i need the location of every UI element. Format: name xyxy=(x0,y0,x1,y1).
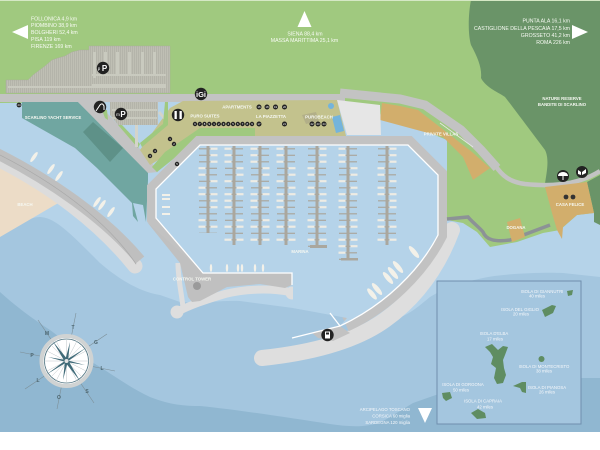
label: Nature reserve: BANDITE DI SCARLINO xyxy=(538,102,587,107)
icon: crane xyxy=(94,101,106,113)
compass rose xyxy=(20,313,115,409)
control tower: CONTROL TOWER xyxy=(173,276,212,282)
numbered location markers: 4 xyxy=(154,149,156,153)
compass rose: T xyxy=(71,325,75,331)
numbered location markers: 16 xyxy=(257,105,261,109)
Casa Felice: CASA FELICE xyxy=(556,202,584,207)
directions: north-west: PISA 119 km xyxy=(31,37,61,43)
label: Nature reserve xyxy=(538,96,587,107)
numbered location markers: 4 xyxy=(228,122,230,126)
directions: north xyxy=(271,11,338,44)
numbered location markers: 7 xyxy=(242,122,244,126)
directions: east: GROSSETO 41,2 km xyxy=(521,33,570,39)
left breakwater xyxy=(0,153,140,266)
scarlino yacht service area xyxy=(22,102,148,222)
outer mole xyxy=(262,230,452,358)
directions: east: PUNTA ALA 16,1 km xyxy=(523,18,570,24)
directions: north-west xyxy=(12,16,78,50)
Casa Felice xyxy=(545,182,594,239)
label: marina: MARINA xyxy=(291,249,309,254)
directions: east xyxy=(474,18,588,46)
compass rose: G xyxy=(94,340,98,346)
island labels: 38 miles xyxy=(536,368,552,374)
numbered location markers: 24 xyxy=(17,103,21,107)
land: green terrain xyxy=(0,0,600,247)
island labels: 20 miles xyxy=(513,312,529,316)
resort labels: PUROBEACH xyxy=(305,114,333,120)
icon: information xyxy=(195,88,207,100)
beach xyxy=(0,162,60,237)
island labels: 40 miles xyxy=(529,294,545,298)
moored boats on piers xyxy=(198,146,396,256)
private villas plot xyxy=(380,103,490,180)
numbered location markers: 19 xyxy=(274,105,277,109)
resort labels xyxy=(190,104,333,120)
control tower xyxy=(173,276,212,290)
directions: north: SIENA 88,4 km xyxy=(287,32,323,38)
inset map: Tuscan archipelago xyxy=(437,281,581,424)
main road xyxy=(0,93,600,185)
outer moored boats xyxy=(29,151,116,218)
numbered location markers: 5 xyxy=(232,122,234,126)
control tower quay xyxy=(147,222,292,302)
resort labels: PURO SUITES xyxy=(190,114,220,118)
numbered location markers: 1 xyxy=(213,122,215,126)
eastern coast road xyxy=(447,217,550,241)
numbered location markers: 8 xyxy=(204,122,206,126)
directions: south xyxy=(360,407,432,425)
numbered location markers: 18 xyxy=(265,105,269,109)
island labels: 17 miles xyxy=(487,336,503,342)
island labels: ISOLA DI PIANOSA xyxy=(528,385,566,390)
island labels: ISOLA DI GORGONA xyxy=(442,382,484,387)
island labels: ISOLA DI GIANNUTRI xyxy=(521,289,563,294)
island labels: ISOLA D'ELBA xyxy=(480,331,508,336)
icon: fuel pump xyxy=(321,329,334,341)
fuel quay xyxy=(312,326,350,341)
label: private villas: PRIVATE VILLAS xyxy=(424,132,458,136)
inner pier xyxy=(170,263,298,318)
island labels: 50 miles xyxy=(453,388,469,392)
numbered location markers: 2 xyxy=(173,142,175,146)
island labels: ISOLA DEL GIGLIO xyxy=(501,307,540,312)
numbered location markers: 24 xyxy=(322,122,326,126)
directions: south: SARDEGNA 120 miglia xyxy=(365,420,411,425)
icon: car park P xyxy=(97,62,109,74)
mid-depth water xyxy=(0,217,600,432)
numbered location markers: 6 xyxy=(237,122,239,126)
icon: restrooms xyxy=(172,109,184,121)
island labels: 26 miles xyxy=(539,390,555,394)
icon: information: iGi xyxy=(196,90,206,99)
deep water xyxy=(0,292,600,432)
numbered location markers: 1 xyxy=(169,137,171,141)
icon: marina P: P xyxy=(120,110,126,119)
icon: marina P xyxy=(115,108,127,120)
numbered location markers: 2 xyxy=(218,122,220,126)
numbered location markers: 3 xyxy=(149,154,151,158)
compass rose: S xyxy=(85,389,89,395)
numbered location markers: 7 xyxy=(199,122,201,126)
numbered location markers: 22 xyxy=(310,122,314,126)
numbered location markers: 21 xyxy=(283,122,286,126)
directions: south: CORSICA 60 miglia xyxy=(372,414,411,418)
islands xyxy=(442,290,573,419)
background: sea xyxy=(0,90,600,432)
directions: east: CASTIGLIONE DELLA PESCAIA 17,5 km xyxy=(474,26,570,32)
island labels: ISOLA DI CAPRAIA xyxy=(464,398,502,404)
upper car park xyxy=(6,46,170,93)
numbered location markers: 8 xyxy=(247,122,249,126)
island labels: ISOLA DI MONTECRISTO xyxy=(519,364,570,369)
numbered location markers: 17 xyxy=(257,122,261,126)
directions: north-west: FOLLONICA 4,9 km xyxy=(31,16,77,22)
compass rose: L xyxy=(36,378,40,384)
directions: north: MASSA MARITTIMA 25,1 km xyxy=(271,38,338,44)
numbered location markers: 6 xyxy=(194,122,196,126)
label: beach: BEACH xyxy=(17,202,33,207)
olive resort area xyxy=(140,100,346,172)
small boats in basin xyxy=(162,194,264,272)
icon: car park P: P xyxy=(102,64,108,73)
directions: south: ARCIPELAGO TOSCANO xyxy=(360,407,411,412)
icon: hiking xyxy=(576,166,588,178)
compass rose: P xyxy=(30,353,34,359)
land: nature reserve xyxy=(469,0,600,225)
numbered location markers xyxy=(17,103,326,166)
icon: marina P: m xyxy=(116,112,120,117)
top edge highlight xyxy=(0,0,600,1)
directions: east: ROMA 226 km xyxy=(536,40,570,46)
scarlino yacht service area: SCARLINO YACHT SERVICE xyxy=(25,115,81,120)
island labels xyxy=(442,289,570,410)
marina basin xyxy=(156,145,438,326)
directions: north-west: BOLGHERI 52,4 km xyxy=(31,30,78,36)
icon: car park P: p xyxy=(98,66,101,71)
resort labels: LA PIAZZETTA xyxy=(256,114,286,119)
numbered location markers: 9 xyxy=(209,122,211,126)
numbered location markers: 20 xyxy=(283,105,286,109)
harbour white edge xyxy=(156,145,438,338)
numbered location markers: 23 xyxy=(316,122,320,126)
directions: north-west: FIRENZE 169 km xyxy=(31,44,72,50)
numbered location markers: 9 xyxy=(251,122,253,126)
lower car park xyxy=(102,102,168,148)
marina piers xyxy=(199,146,396,260)
Dogana xyxy=(506,218,526,242)
white service area xyxy=(337,100,381,135)
label: Nature reserve: NATURE RESERVE xyxy=(542,96,582,101)
numbered location markers: 5 xyxy=(176,162,178,166)
island labels: 42 miles xyxy=(477,404,493,410)
Dogana: DOGANA xyxy=(506,225,526,230)
numbered location markers: 3 xyxy=(223,122,225,126)
large yachts xyxy=(366,245,421,301)
compass rose: M xyxy=(45,331,49,337)
icon: umbrella xyxy=(557,170,569,182)
resort labels: APARTMENTS xyxy=(222,104,252,110)
harbour quay xyxy=(156,145,438,323)
compass rose: O xyxy=(57,395,61,401)
compass rose: L xyxy=(100,366,104,372)
directions: north-west: PIOMBINO 38,9 km xyxy=(31,23,77,29)
